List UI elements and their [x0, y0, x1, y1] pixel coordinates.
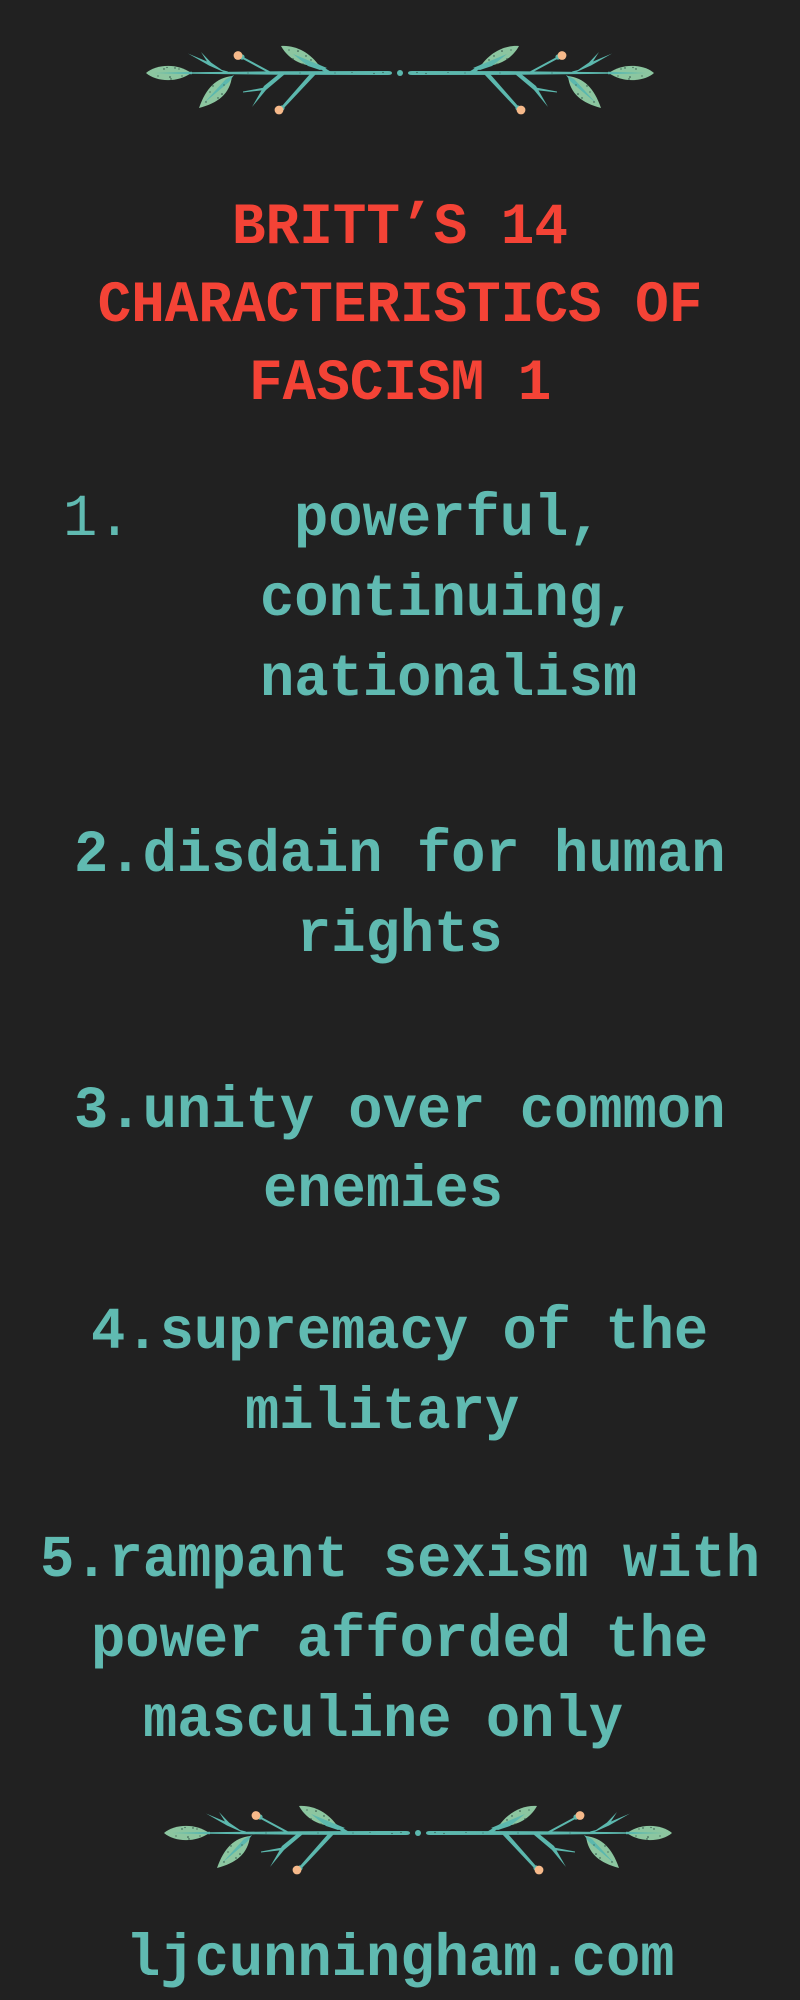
item 1: powerful, continuing, nationalism — [260, 486, 637, 713]
item 1: powerful, continuing, nationalism: powerful, — [294, 486, 603, 553]
item 4: supremacy of the military: military — [245, 1379, 519, 1446]
title: CHARACTERISTICS OF — [98, 274, 702, 339]
title — [98, 196, 702, 417]
item 3: unity over common enemies — [74, 1078, 726, 1224]
top floral ornament — [146, 46, 654, 114]
item 5: rampant sexism with power afforded the masculine only: power afforded the — [91, 1607, 708, 1674]
item 2: disdain for human rights — [74, 822, 726, 969]
item 1: powerful, continuing, nationalism: continuing, — [260, 566, 637, 633]
title: FASCISM 1 — [249, 352, 551, 417]
item 1: powerful, continuing, nationalism: nationalism — [260, 646, 637, 713]
item 3: unity over common enemies: enemies — [263, 1157, 503, 1224]
item 1: number: 1. — [63, 486, 132, 553]
item 2: disdain for human rights: rights — [297, 902, 503, 969]
item 5: rampant sexism with power afforded the masculine only — [40, 1527, 760, 1754]
item 3: unity over common enemies: 3.unity over common — [74, 1078, 726, 1145]
website footer: ljcunningham.com — [126, 1926, 675, 1993]
title: BRITT’S 14 — [232, 196, 568, 261]
bottom floral ornament — [164, 1806, 672, 1874]
item 5: rampant sexism with power afforded the masculine only: masculine only — [143, 1687, 623, 1754]
item 4: supremacy of the military: 4.supremacy of the — [91, 1299, 708, 1366]
item 2: disdain for human rights: 2.disdain for human — [74, 822, 726, 889]
item 4: supremacy of the military — [91, 1299, 708, 1446]
item 5: rampant sexism with power afforded the masculine only: 5.rampant sexism with — [40, 1527, 760, 1594]
